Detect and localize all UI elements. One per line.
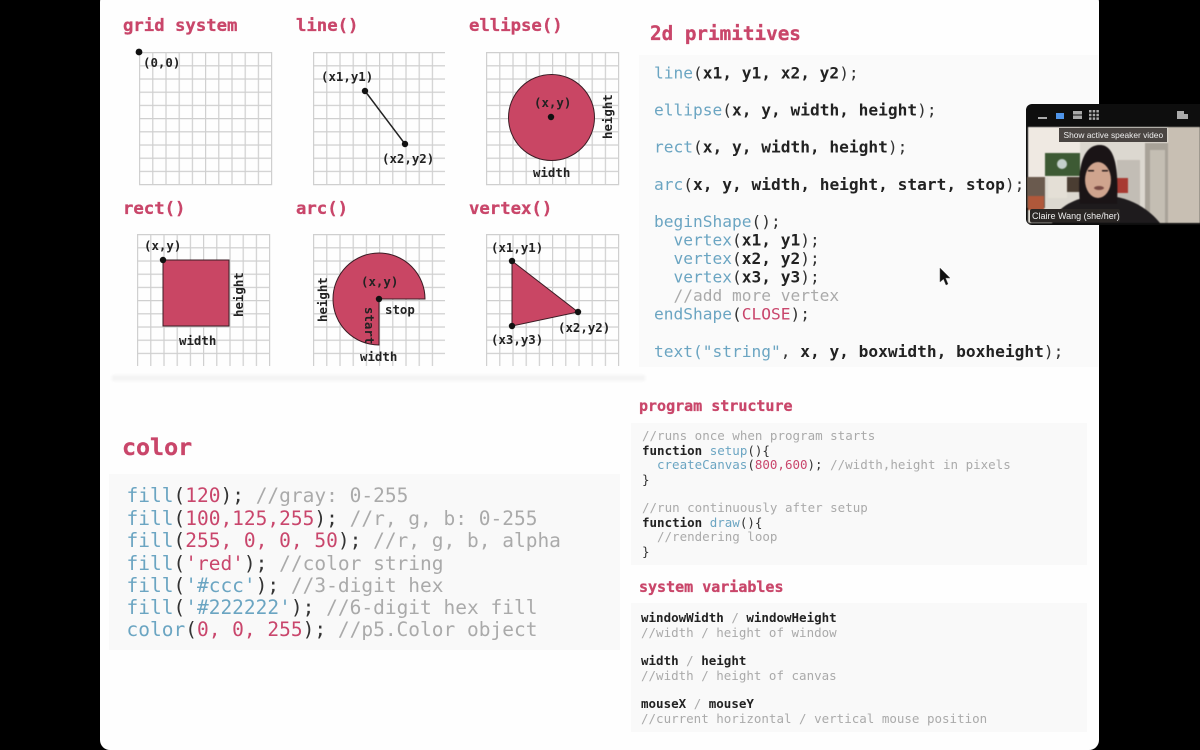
door right: [1168, 127, 1200, 223]
code: 2d primitives: text("string", x, y, boxwidth, boxheight);: [654, 342, 1063, 361]
right eye: [1102, 170, 1108, 172]
corner point: [160, 257, 166, 263]
code: 2d primitives: arc(x, y, width, height, start, stop);: [654, 175, 1024, 194]
label: width: width: [533, 165, 570, 180]
tooltip text: Show active speaker video: [1064, 130, 1163, 140]
face: [1085, 162, 1111, 198]
label: x,y: (x,y): [361, 274, 398, 289]
video call window: [1026, 104, 1200, 225]
panel: system variables code background: [631, 603, 1087, 732]
mouth: [1094, 186, 1104, 190]
heading: system variables: system variables: [639, 578, 784, 596]
label: x3,y3: (x3,y3): [491, 332, 543, 347]
code: color: fill(100,125,255); //r, g, b: 0-255: [126, 507, 537, 530]
heading: arc(): arc(): [296, 199, 348, 219]
code: program structure: //run continuously after setup: [642, 500, 868, 515]
name tag box: [1030, 209, 1120, 222]
code: color: [126, 484, 561, 641]
code: system variables: //width / height of window: [641, 625, 837, 640]
poster: [1045, 153, 1080, 176]
tooltip box: [1059, 128, 1167, 142]
heading: line(): line(): [296, 16, 358, 36]
tooltip: [1059, 128, 1167, 142]
code: system variables: //width / height of canvas: [641, 668, 837, 683]
left eye: [1088, 170, 1094, 172]
icon: gallery view: [1089, 110, 1099, 120]
center point: [548, 114, 554, 120]
chair: [1116, 178, 1128, 193]
label: stop: stop: [385, 302, 415, 317]
code: program structure: //runs once when program starts: [642, 428, 875, 443]
code: 2d primitives: ellipse(x, y, width, height);: [654, 100, 937, 120]
heading: ellipse(): ellipse(): [469, 16, 563, 36]
label: x2,y2: (x2,y2): [558, 320, 610, 335]
vertex point 3: [509, 323, 515, 329]
code: 2d primitives: [654, 64, 1063, 361]
grid: [313, 52, 445, 185]
icon: mouse cursor: [940, 268, 950, 285]
panel: 2d primitives code background: [639, 55, 1098, 367]
label: x,y: (x,y): [534, 95, 571, 110]
code: color: color(0, 0, 255); //p5.Color object: [126, 618, 537, 641]
heading: program structure: program structure: [639, 397, 793, 415]
label: x1,y1: (x1,y1): [491, 240, 543, 255]
code: system variables: windowWidth / windowHeight: [641, 610, 837, 625]
code: program structure: //rendering loop: [657, 529, 777, 544]
label: height: height: [600, 94, 615, 139]
vertex point 1: [509, 258, 515, 264]
icon: minimize: [1038, 117, 1047, 119]
panel: color code background: [109, 474, 620, 650]
panel: program structure code background: [631, 423, 1087, 565]
code: 2d primitives: //add more vertex: [674, 286, 839, 305]
icon: layout: [1177, 111, 1188, 119]
code: system variables: mouseX / mouseY: [641, 696, 754, 711]
panel: vertex diagram: [469, 199, 619, 366]
triangle shape: [512, 261, 578, 326]
panel: grid system diagram: [123, 16, 272, 185]
code: system variables: width / height: [641, 653, 746, 668]
door frame inner: [1150, 150, 1165, 223]
text block: color section: [122, 434, 561, 641]
panel: rect diagram: [123, 199, 270, 366]
text block: system variables section: [639, 578, 987, 726]
origin point: [136, 49, 142, 55]
code: system variables: //current horizontal / vertical mouse position: [641, 711, 987, 726]
code: 2d primitives: vertex(x1, y1);: [674, 230, 820, 250]
label: x1,y1: (x1,y1): [321, 69, 373, 84]
label: x2,y2: (x2,y2): [382, 151, 434, 166]
code: program structure: [642, 428, 1011, 559]
code: 2d primitives: vertex(x3, y3);: [674, 268, 820, 286]
icon: speaker view: [1056, 113, 1064, 119]
label: origin: (0,0): [143, 55, 180, 70]
code: 2d primitives: line(x1, y1, x2, y2);: [654, 64, 859, 82]
label: width: width: [360, 349, 397, 364]
heading: grid system: grid system: [123, 16, 237, 36]
grid: [137, 234, 270, 366]
text block: 2d primitives section: [650, 22, 1063, 361]
room wall: [1028, 127, 1200, 223]
grid: [139, 52, 272, 185]
code: color: fill('red'); //color string: [126, 552, 444, 575]
panel: line diagram: [296, 16, 445, 185]
code: 2d primitives: endShape(CLOSE);: [654, 304, 810, 324]
line shape: [365, 91, 405, 144]
code: program structure: }: [642, 472, 650, 487]
code: program structure: createCanvas(800,600); //width,height in pixels: [657, 457, 1011, 472]
code: 2d primitives: vertex(x2, y2);: [674, 249, 820, 268]
name text: Claire Wang (she/her): [1032, 211, 1120, 221]
poster highlight: [1057, 159, 1067, 169]
code: color: fill(255, 0, 0, 50); //r, g, b, alpha: [126, 529, 561, 552]
code: system variables: [641, 610, 987, 726]
grid: [313, 234, 445, 366]
code: color: fill('#ccc'); //3-digit hex: [126, 574, 444, 597]
panel: ellipse diagram: [469, 16, 619, 185]
shelf books: [1028, 196, 1044, 210]
code: program structure: }: [642, 544, 650, 559]
heading: vertex(): vertex(): [469, 199, 552, 219]
heading: 2d primitives: 2d primitives: [650, 22, 801, 45]
end point: [402, 141, 408, 147]
code: color: fill('#222222'); //6-digit hex fill: [126, 596, 537, 619]
text block: program structure section: [639, 397, 1011, 559]
heading: color: color: [122, 434, 192, 461]
label: x,y: (x,y): [144, 238, 181, 253]
rect shape: [163, 260, 229, 326]
label: start: start: [362, 307, 377, 344]
center point: [376, 296, 382, 302]
ellipse shape: [508, 74, 594, 160]
torso: [1052, 196, 1160, 223]
icon: stacked view: [1073, 111, 1082, 119]
label: height: height: [315, 277, 330, 322]
back door: [1117, 160, 1140, 205]
panel: arc diagram: [296, 199, 445, 366]
grid: [486, 234, 619, 366]
divider band under diagrams: [112, 375, 645, 381]
grid: [486, 52, 619, 185]
video feed: [1027, 127, 1200, 223]
vertex point 2: [575, 309, 581, 315]
start point: [362, 88, 368, 94]
code: program structure: function draw(){: [642, 515, 762, 530]
hair: [1079, 145, 1117, 204]
label: height: height: [231, 272, 246, 317]
code: 2d primitives: rect(x, y, width, height);: [654, 138, 907, 156]
heading: rect(): rect(): [123, 199, 185, 219]
toolbar icons: [1038, 110, 1188, 120]
shelf: [1027, 177, 1045, 208]
door frame: [1145, 143, 1168, 223]
cabinet: [1067, 177, 1080, 192]
box under poster: [1048, 177, 1067, 198]
window frame: [1026, 104, 1200, 225]
label: width: width: [179, 333, 216, 348]
name tag: [1030, 209, 1120, 222]
diagrams: all primitive diagrams: [123, 16, 619, 366]
arc shape: [333, 253, 425, 345]
code: color: fill(120); //gray: 0-255: [126, 484, 408, 507]
code: 2d primitives: beginShape();: [654, 212, 781, 231]
bright wall left: [1028, 127, 1080, 177]
code: program structure: function setup(){: [642, 443, 770, 458]
